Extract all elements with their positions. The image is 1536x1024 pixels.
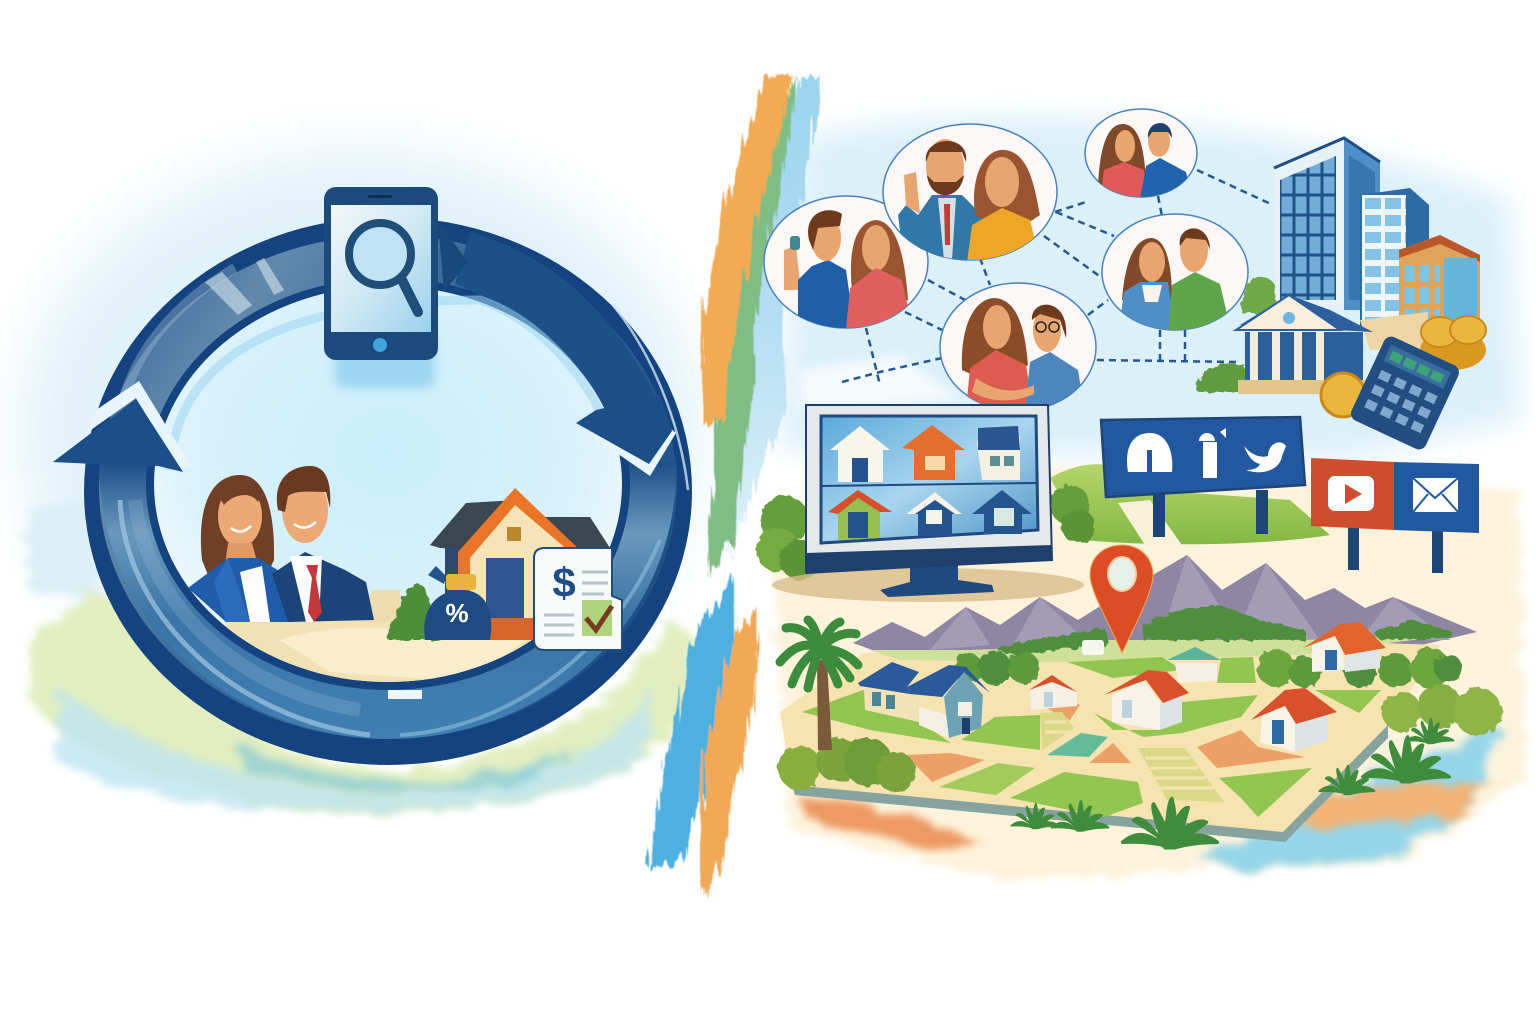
upper right red house: [1303, 622, 1386, 672]
bag with percent: %: [445, 598, 469, 628]
house: [430, 488, 610, 640]
monitor with home listings: [772, 405, 1084, 602]
map ground with lots: [780, 635, 1450, 842]
house with loan documents: [387, 488, 622, 650]
coins: [1321, 316, 1486, 417]
inner rim: [170, 300, 608, 470]
teal house: [1167, 647, 1221, 683]
cycle ring with arrows: [53, 217, 692, 765]
bubble: couple with glasses: [940, 283, 1096, 420]
blue house: [858, 662, 990, 738]
center red house: [1104, 670, 1189, 730]
calculator: [1348, 334, 1462, 452]
video and email signs: [1311, 458, 1479, 573]
bushes on map: [778, 648, 1502, 792]
tower three: [1399, 235, 1480, 322]
brush stroke divider: [647, 76, 823, 896]
ring body: [84, 217, 692, 765]
document with dollar and check: [534, 548, 622, 650]
tower two: [1360, 188, 1429, 330]
bushes beside monitor: [756, 485, 1095, 580]
mountains: [853, 555, 1477, 660]
small red house: [1029, 675, 1077, 710]
right arrowhead: [576, 395, 676, 476]
listing houses: [828, 425, 1032, 540]
tiny white house: [1082, 640, 1104, 655]
social media billboard: [1101, 417, 1305, 537]
man: [272, 466, 374, 622]
ring interior sky: [154, 286, 622, 682]
background wash: right: [770, 117, 1525, 880]
location pin: [1090, 545, 1153, 653]
left arrowhead: [53, 381, 192, 472]
tower one: [1274, 138, 1380, 310]
notch behind phone: [438, 222, 468, 292]
tropical plants: [1011, 719, 1454, 848]
icon: smartphone with magnifier: [324, 187, 438, 388]
green hill behind signs: [1050, 464, 1330, 545]
buildings: [1197, 138, 1486, 452]
ground inside ring: [225, 590, 532, 682]
houses on map: [858, 622, 1386, 752]
background wash: left: [20, 150, 700, 812]
network dashed connectors: [842, 170, 1273, 385]
bank: [1197, 277, 1428, 394]
palm tree: [780, 620, 858, 750]
trees along mountain base: [996, 605, 1452, 655]
bubble: couple in green and blue: [1102, 214, 1248, 335]
lower right red house: [1251, 688, 1337, 752]
bubble: couple with keys: [764, 196, 928, 340]
bubble: agent and client: [883, 124, 1057, 270]
bush: [387, 584, 440, 640]
people: couple in suits: [188, 466, 374, 622]
woman: [188, 475, 294, 622]
bag with percent: [424, 566, 491, 640]
bubble: small couple: [1085, 109, 1197, 200]
document with dollar and check: $: [552, 559, 576, 606]
